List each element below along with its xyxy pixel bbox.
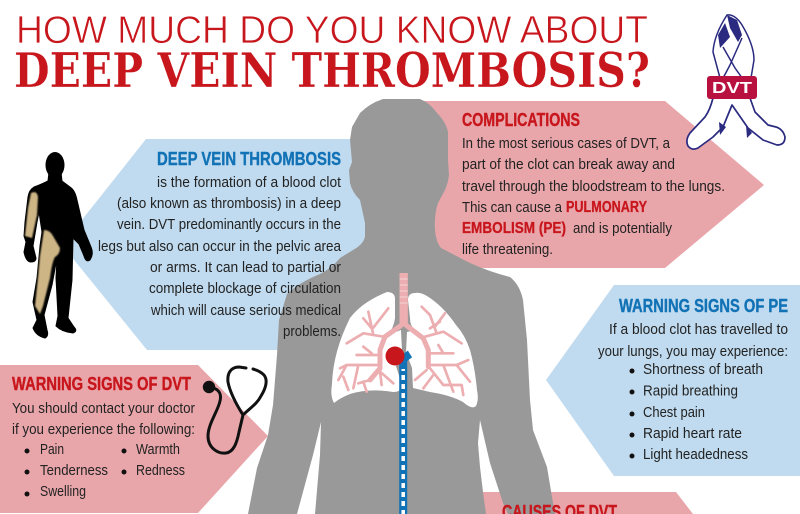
left lung (331, 292, 402, 403)
text: complications: life threatening. (462, 241, 553, 258)
text: deep vein thrombosis: is the formation of a blood clot (157, 174, 342, 191)
panel: complications background (400, 101, 764, 268)
text: deep vein thrombosis: DEEP VEIN THROMBOSIS (157, 148, 341, 169)
lungs (331, 273, 478, 407)
text: warning signs of DVT: You should contact your doctor (12, 400, 195, 417)
text: warning signs of DVT: if you experience the following: (12, 421, 195, 438)
text: complications: COMPLICATIONS (462, 109, 580, 130)
icon: human figure with affected leg (24, 152, 92, 338)
text: deep vein thrombosis: or arms. It can lead to partial or (150, 259, 341, 276)
text: warning signs of DVT: Tenderness (40, 462, 108, 479)
text: complications: travel through the bloodstream to the lungs. (462, 178, 725, 195)
icon: DVT sock ribbon (687, 15, 785, 149)
text: deep vein thrombosis (98, 148, 342, 340)
text: warning signs of PE (598, 295, 788, 463)
title (14, 9, 650, 99)
panel: deep vein thrombosis background (62, 139, 400, 350)
text: warning signs of DVT: Pain (40, 441, 64, 458)
panel: warning signs of DVT background (0, 365, 268, 513)
text: warning signs of PE: If a blood clot has travelled to (609, 321, 788, 338)
text: warning signs of PE: Rapid breathing (643, 382, 738, 400)
title: HOW MUCH DO YOU KNOW ABOUT (16, 9, 648, 52)
text: warning signs of DVT (12, 373, 195, 500)
text: warning signs of PE: Light headedness (643, 446, 748, 463)
text: deep vein thrombosis: which will cause serious medical (150, 302, 341, 319)
text: deep vein thrombosis: (also known as thrombosis) in a deep (117, 195, 341, 212)
text: complications: In the most serious cases of DVT, a (462, 135, 671, 152)
text: warning signs of DVT: Warmth (136, 441, 180, 458)
blood clot (386, 346, 404, 366)
icon: stethoscope (203, 367, 266, 453)
text: warning signs of PE: Rapid heart rate (643, 425, 742, 442)
text: complications: and is potentially (573, 220, 672, 237)
text: deep vein thrombosis: complete blockage of circulation (149, 280, 341, 297)
text: complications (462, 109, 725, 258)
text: complications: PULMONARY (566, 199, 648, 216)
DVT label (707, 76, 757, 99)
text: warning signs of DVT: Redness (136, 462, 185, 479)
text: deep vein thrombosis: vein. DVT predominantly occurs in the (117, 216, 341, 233)
text: warning signs of PE: Chest pain (643, 404, 705, 421)
text: complications: This can cause a (462, 199, 563, 216)
right lung (406, 293, 478, 407)
text: warning signs of DVT: Swelling (40, 483, 86, 500)
text: complications: part of the clot can break away and (462, 156, 675, 173)
body silhouette (248, 99, 555, 514)
text: warning signs of DVT: WARNING SIGNS OF DVT (12, 373, 192, 394)
text: warning signs of PE: Shortness of breath (643, 361, 763, 378)
panel: warning signs of PE background (546, 285, 800, 476)
trachea and bronchial tree (338, 273, 470, 395)
icon: DVT sock ribbon: DVT (712, 80, 752, 97)
panel: causes of DVT background (440, 492, 693, 514)
text: complications: EMBOLISM (PE) (462, 220, 566, 237)
text: deep vein thrombosis: problems. (283, 323, 341, 340)
text: deep vein thrombosis: legs but also can occur in the pelvic area (98, 238, 342, 255)
blood vessel (403, 354, 410, 514)
title: DEEP VEIN THROMBOSIS? (14, 43, 650, 99)
